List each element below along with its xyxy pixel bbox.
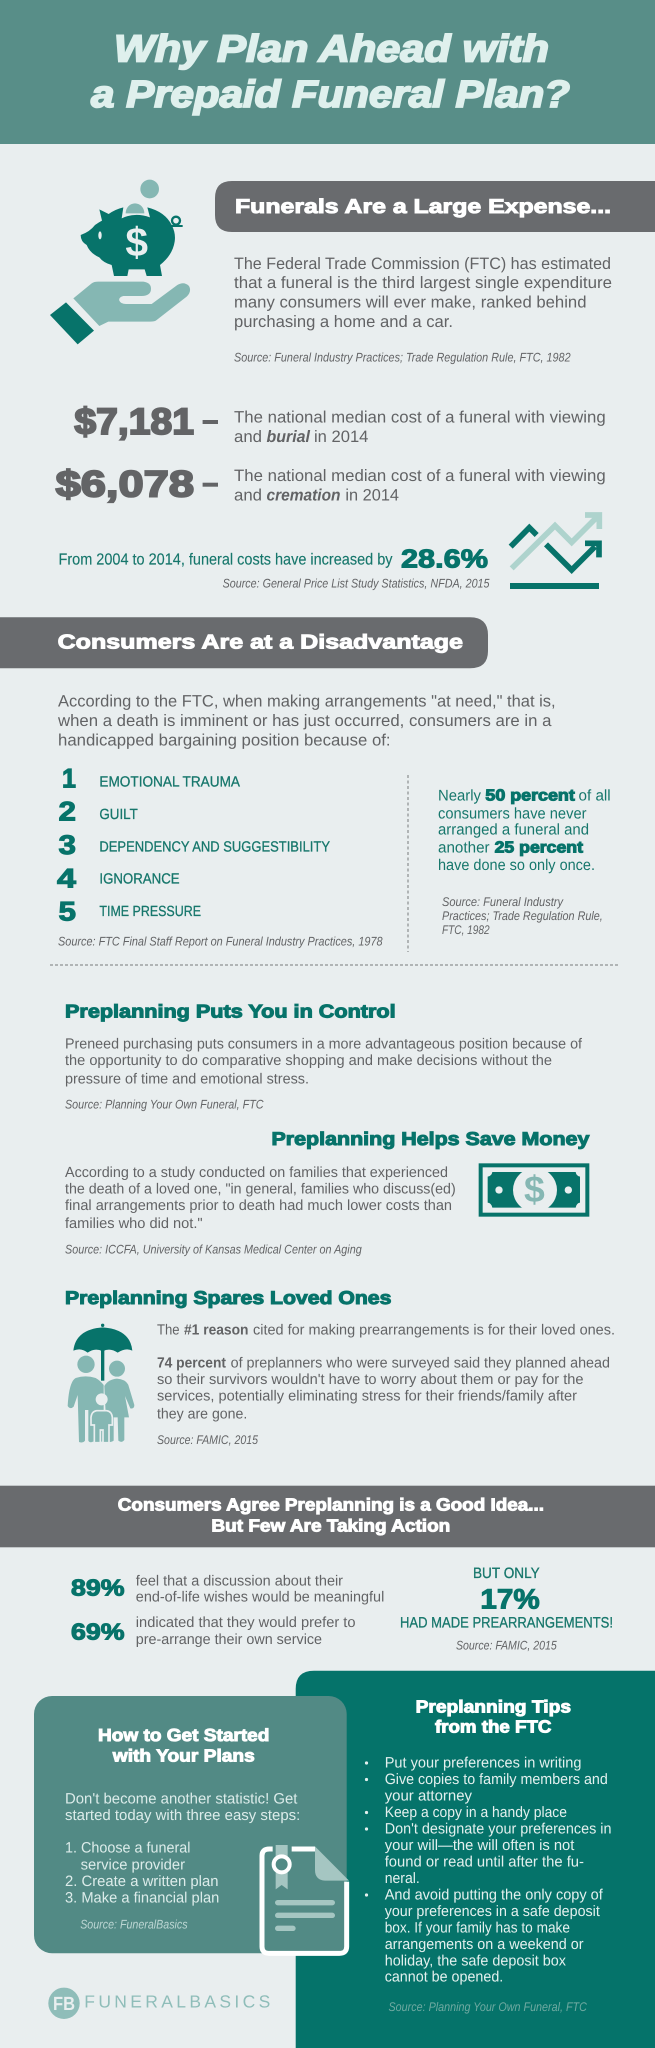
stat: cremation cost: $6,078: [56, 464, 194, 505]
list: five disadvantages: 4: [57, 863, 76, 893]
callout: but only 17 percent: Source: FAMIC, 2015: [456, 1638, 557, 1652]
heading band: consumers agree: But Few Are Taking Action: [211, 1515, 450, 1535]
source: funeral industry practices: Source: Funeral Industry: [442, 895, 564, 909]
callout: but only 17 percent: [400, 1565, 613, 1652]
list: FTC tips: box. If your family has to make: [385, 1919, 570, 1936]
stat: 89 percent: end-of-life wishes would be meaningful: [136, 1590, 384, 1606]
heading band: consumers agree: [0, 1486, 655, 1547]
list: FTC tips: Give copies to family members and: [385, 1771, 608, 1788]
heading: funerals expense: Funerals Are a Large Expense...: [235, 196, 611, 218]
text: three easy steps intro: Don't become another statistic! Get: [65, 1790, 298, 1807]
stat: burial cost: The national median cost of a funeral with viewing: [234, 409, 606, 427]
text: preneed purchasing: pressure of time and emotional stress.: [65, 1071, 309, 1087]
text: number one reason: The: [157, 1322, 180, 1338]
list: three steps: service provider: [81, 1856, 185, 1873]
callout: 50 and 25 percent: have done so only once.: [438, 857, 595, 874]
callout: but only 17 percent: HAD MADE PREARRANGEMENTS!: [400, 1614, 613, 1631]
list: FTC tips: found or read until after the fu-: [385, 1854, 584, 1871]
stat: burial cost: [74, 401, 606, 446]
list: five disadvantages: 1: [62, 763, 76, 793]
text: 74 percent of preplanners: [157, 1355, 610, 1423]
text: number one reason: #1 reason: [184, 1322, 249, 1338]
source: planning your own funeral: Source: Planning Your Own Funeral, FTC: [388, 2000, 588, 2014]
icon: certified document: [262, 1845, 349, 1953]
logo: funeral basics: [48, 1988, 270, 2019]
callout: 50 and 25 percent: consumers have never: [438, 805, 586, 822]
text: three easy steps intro: [65, 1790, 300, 1824]
stat: burial cost: and: [234, 428, 262, 446]
heading: preplanning tips: from the FTC: [435, 1717, 552, 1737]
icon: family under umbrella: [68, 1324, 134, 1443]
text: study on families: According to a study conducted on families that experienced: [65, 1165, 448, 1181]
list: FTC tips: neral.: [385, 1870, 420, 1887]
text: study on families: [65, 1165, 456, 1232]
stat: 89 percent: feel that a discussion about their: [136, 1573, 343, 1589]
panel: preplanning tips from the FTC: [296, 1671, 655, 2048]
list: FTC tips: arrangements on a weekend or: [385, 1936, 584, 1953]
source: planning your own funeral: Source: Planning Your Own Funeral, FTC: [65, 1098, 264, 1112]
text: handicapped bargaining position: when a death is imminent or has just occurred, consumers are in a: [57, 712, 552, 730]
title banner: a Prepaid Funeral Plan?: [91, 74, 570, 116]
title banner: Why Plan Ahead with: [114, 29, 549, 71]
callout: 50 and 25 percent: 50 percent: [485, 787, 576, 804]
heading: spares loved ones: Preplanning Spares Loved Ones: [65, 1287, 391, 1308]
stat: 69 percent: pre-arrange their own service: [136, 1632, 322, 1648]
logo: funeral basics: FUNERALBASICS: [84, 1991, 270, 2011]
list: three steps: 2. Create a written plan: [65, 1873, 218, 1890]
text: 74 percent of preplanners: services, potentially eliminating stress for their friends/family after: [157, 1388, 577, 1404]
stat: cremation cost: in 2014: [345, 486, 399, 504]
heading: funerals expense: [215, 181, 655, 232]
text: FTC expenditure estimate: The Federal Trade Commission (FTC) has estimated: [234, 255, 611, 273]
list: five disadvantages: 3: [58, 830, 76, 860]
callout: 50 and 25 percent: of all: [578, 787, 611, 804]
callout: 50 and 25 percent: another: [438, 839, 490, 856]
panel: preplanning helps save money: [65, 1128, 590, 1257]
source: ICCFA: Source: ICCFA, University of Kansas Medical Center on Aging: [65, 1243, 362, 1257]
text: 74 percent of preplanners: 74 percent: [157, 1355, 226, 1371]
callout: 50 and 25 percent: arranged a funeral and: [438, 822, 589, 839]
callout: costs increased 28.6 percent: [58, 543, 490, 590]
text: preneed purchasing: Preneed purchasing puts consumers in a more advantageous position because of: [65, 1036, 583, 1052]
source: funeral basics: Source: FuneralBasics: [80, 1917, 188, 1931]
heading band: consumers agree: Consumers Agree Preplanning is a Good Idea...: [118, 1495, 544, 1515]
list: FTC tips: your attorney: [385, 1788, 472, 1805]
heading: preplanning tips: [416, 1697, 571, 1737]
text: number one reason: cited for making prearrangements is for their loved ones.: [253, 1322, 615, 1338]
heading: preplanning tips: Preplanning Tips: [416, 1697, 571, 1717]
stat: burial cost: $7,181: [74, 401, 194, 442]
callout: costs increased 28.6 percent: Source: General Price List Study Statistics, NFDA, 2015: [223, 576, 490, 590]
callout: 50 and 25 percent: 25 percent: [495, 839, 584, 856]
callout: costs increased 28.6 percent: 28.6%: [401, 543, 488, 573]
text: 74 percent of preplanners: so their survivors wouldn't have to worry about them or pay for the: [157, 1372, 584, 1388]
text: handicapped bargaining position: According to the FTC, when making arrangements "at need," that is,: [58, 693, 556, 711]
callout: but only 17 percent: 17%: [480, 1583, 540, 1614]
list: five disadvantages: TIME PRESSURE: [99, 904, 201, 920]
text: FTC expenditure estimate: that a funeral is the third largest single expenditure: [234, 274, 612, 292]
list: FTC tips: And avoid putting the only copy of: [385, 1887, 604, 1904]
stat: cremation cost: The national median cost of a funeral with viewing: [234, 467, 606, 485]
stat: 69 percent: indicated that they would prefer to: [136, 1615, 356, 1631]
icon: piggy bank over hand: $: [125, 219, 148, 265]
heading: how to get started: How to Get Started: [98, 1725, 269, 1745]
list: five disadvantages: 5: [58, 897, 76, 927]
panel: preplanning spares loved ones: [65, 1287, 615, 1447]
list: five disadvantages: GUILT: [99, 807, 138, 823]
source: FAMIC: Source: FAMIC, 2015: [157, 1433, 258, 1447]
icon: dollar bill: $: [524, 1168, 545, 1210]
list: five disadvantages: 2: [58, 797, 76, 827]
icon: piggy bank over hand: [50, 180, 190, 344]
source: funeral industry practices: Source: Funeral Industry Practices; Trade Regulation Rule, FTC, 1982: [234, 351, 571, 365]
source: FTC final staff report: Source: FTC Final Staff Report on Funeral Industry Practices, 1978: [58, 934, 383, 948]
text: handicapped bargaining position: [57, 693, 556, 749]
list: FTC tips: cannot be opened.: [385, 1969, 503, 1986]
text: three easy steps intro: started today with three easy steps:: [65, 1807, 300, 1824]
text: 74 percent of preplanners: of preplanners who were surveyed said they planned ahead: [231, 1355, 610, 1371]
panel: how to get started: [34, 1696, 349, 1953]
text: study on families: the death of a loved one, "in general, families who discuss(ed): [65, 1181, 456, 1197]
text: 74 percent of preplanners: they are gone.: [157, 1407, 247, 1423]
list: five disadvantages: [57, 763, 330, 927]
stat: 89 percent: 89%: [71, 1575, 124, 1601]
list: FTC tips: your will—the will often is not: [385, 1837, 575, 1854]
text: preneed purchasing: the opportunity to do comparative shopping and make decisions without the: [65, 1053, 552, 1069]
list: five disadvantages: DEPENDENCY AND SUGGESTIBILITY: [99, 839, 330, 855]
heading: how to get started: with Your Plans: [112, 1746, 255, 1766]
text: FTC expenditure estimate: [234, 255, 612, 331]
heading: in control: Preplanning Puts You in Control: [65, 1001, 396, 1022]
list: FTC tips: holiday, the safe deposit box: [385, 1953, 566, 1970]
callout: 50 and 25 percent: [438, 787, 611, 874]
list: FTC tips: Put your preferences in writing: [385, 1755, 582, 1772]
stat: burial cost: burial: [266, 428, 310, 446]
callout: costs increased 28.6 percent: From 2004 to 2014, funeral costs have increased by: [58, 551, 392, 568]
text: handicapped bargaining position: handicapped bargaining position because of:: [58, 731, 391, 749]
stat: cremation cost: cremation: [266, 486, 340, 504]
stat: burial cost: in 2014: [314, 428, 368, 446]
icon: rising trend chart: [510, 515, 599, 589]
heading: save money: Preplanning Helps Save Money: [272, 1128, 590, 1149]
source: funeral industry practices: [442, 895, 603, 937]
callout: but only 17 percent: BUT ONLY: [473, 1565, 540, 1582]
list: FTC tips: [365, 1755, 612, 1986]
title banner: [0, 0, 655, 144]
text: study on families: families who did not.": [65, 1216, 203, 1232]
stat: cremation cost: [56, 464, 606, 505]
heading: how to get started: [98, 1725, 269, 1766]
text: study on families: final arrangements prior to death had much lower costs than: [65, 1198, 452, 1214]
stat: 89 percent: [71, 1573, 384, 1606]
text: FTC expenditure estimate: many consumers will ever make, ranked behind: [234, 293, 586, 311]
heading: consumers disadvantage: [0, 617, 488, 668]
list: FTC tips: Don't designate your preferences in: [385, 1821, 612, 1838]
list: three steps: 3. Make a financial plan: [65, 1889, 219, 1906]
text: preneed purchasing: [65, 1036, 583, 1087]
list: three steps: 1. Choose a funeral: [65, 1840, 190, 1857]
source: funeral industry practices: FTC, 1982: [442, 923, 490, 937]
stat: 69 percent: [71, 1615, 356, 1648]
callout: 50 and 25 percent: Nearly: [438, 787, 481, 804]
stat: 69 percent: 69%: [71, 1618, 124, 1644]
text: FTC expenditure estimate: purchasing a home and a car.: [234, 313, 453, 331]
list: three steps: [65, 1840, 219, 1906]
list: FTC tips: Keep a copy in a handy place: [385, 1804, 567, 1821]
source: funeral industry practices: Practices; Trade Regulation Rule,: [442, 909, 603, 923]
list: five disadvantages: IGNORANCE: [99, 872, 180, 888]
list: five disadvantages: EMOTIONAL TRAUMA: [99, 775, 240, 791]
logo: funeral basics: FB: [53, 1994, 75, 2015]
heading: consumers disadvantage: Consumers Are at a Disadvantage: [58, 631, 463, 653]
panel: preplanning puts you in control: [65, 1001, 583, 1112]
panel: funerals are a large expense: [215, 181, 655, 365]
panel: consumers at a disadvantage: [0, 617, 611, 952]
stat: cremation cost: and: [234, 486, 262, 504]
list: FTC tips: your preferences in a safe deposit: [385, 1903, 601, 1920]
icon: dollar bill: [481, 1165, 587, 1215]
